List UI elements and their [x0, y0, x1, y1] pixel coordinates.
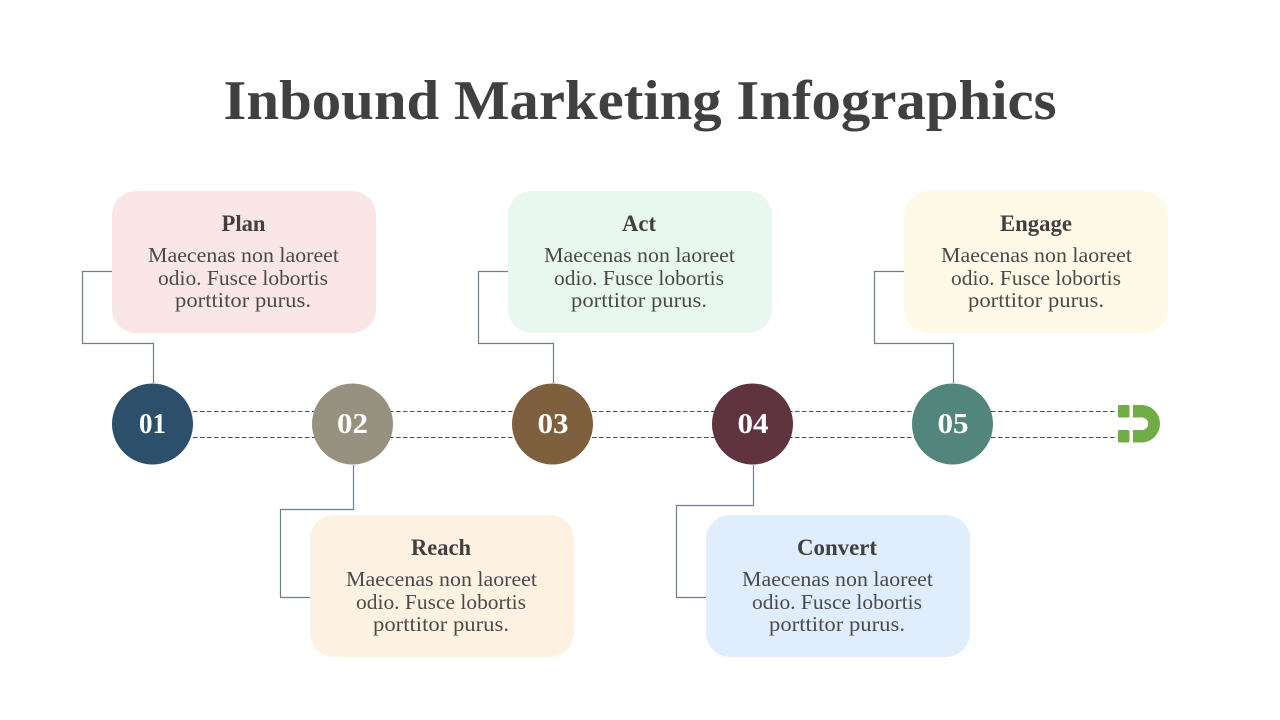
- text block: Act: odio. Fusce lobortis: [554, 266, 724, 290]
- text block: Reach: porttitor purus.: [373, 612, 509, 636]
- connector: Plan: [82, 272, 154, 383]
- step marker 02: 02: [337, 409, 368, 440]
- heading: Convert: Convert: [797, 535, 877, 560]
- icon: magnet: [1118, 405, 1160, 442]
- step marker 01: [112, 384, 193, 464]
- text block: Convert: odio. Fusce lobortis: [752, 590, 922, 614]
- text block: Act: Maecenas non laoreet: [544, 243, 735, 267]
- heading: Plan: Plan: [222, 211, 266, 236]
- step marker 05: [912, 384, 993, 464]
- step marker 05: 05: [938, 409, 968, 440]
- text block: Reach: [346, 567, 537, 636]
- text block: Plan: odio. Fusce lobortis: [158, 266, 328, 290]
- connector: Engage: [874, 272, 954, 383]
- panel: Reach: [310, 515, 574, 657]
- text block: Engage: Maecenas non laoreet: [941, 243, 1132, 267]
- heading: Engage: Engage: [1000, 211, 1072, 236]
- step marker 01: 01: [139, 409, 166, 440]
- title: Inbound Marketing Infographics: [224, 70, 1056, 132]
- step marker 02: [312, 384, 393, 464]
- text block: Act: porttitor purus.: [571, 288, 707, 312]
- step marker 03: [512, 384, 593, 464]
- panel: Engage: [904, 191, 1168, 333]
- text block: Plan: Maecenas non laoreet: [148, 243, 339, 267]
- text block: Engage: porttitor purus.: [968, 288, 1104, 312]
- text block: Convert: Maecenas non laoreet: [742, 567, 933, 591]
- connector: Act: [478, 272, 554, 383]
- connector: Reach: [280, 465, 354, 598]
- dashed timeline lines: [193, 412, 1116, 438]
- heading: Act: Act: [622, 211, 656, 236]
- panel: Plan: [112, 191, 376, 333]
- connector: Convert: [676, 465, 754, 598]
- text block: Plan: porttitor purus.: [175, 288, 311, 312]
- step marker 04: 04: [738, 409, 768, 440]
- text block: Engage: odio. Fusce lobortis: [951, 266, 1121, 290]
- text block: Reach: odio. Fusce lobortis: [356, 590, 526, 614]
- text block: Engage: [941, 243, 1132, 312]
- panel: Act: [508, 191, 772, 333]
- text block: Reach: Maecenas non laoreet: [346, 567, 537, 591]
- heading: Reach: Reach: [411, 535, 471, 560]
- text block: Plan: [148, 243, 339, 312]
- text block: Convert: [742, 567, 933, 636]
- text block: Act: [544, 243, 735, 312]
- step marker 03: 03: [538, 409, 568, 440]
- text block: Convert: porttitor purus.: [769, 612, 905, 636]
- step marker 04: [712, 384, 793, 464]
- panel: Convert: [706, 515, 970, 657]
